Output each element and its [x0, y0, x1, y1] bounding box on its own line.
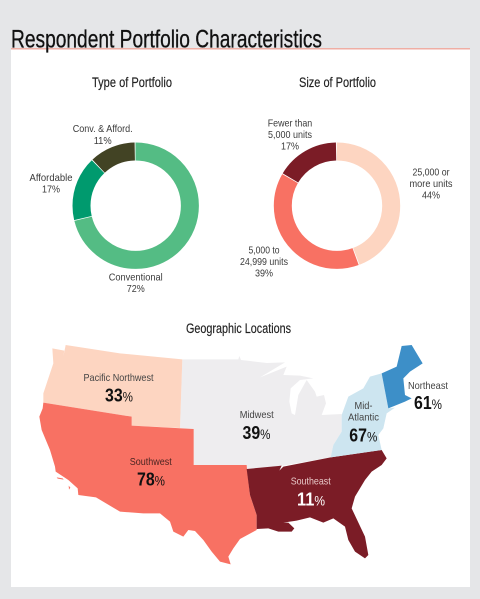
panel: type of portfolio — [30, 75, 190, 295]
label: 5,000 to 24,999 units: 24,999 units — [240, 256, 288, 268]
label: affordable: 17% — [42, 184, 60, 196]
label: fewer than 5,000 units: 17% — [281, 141, 299, 153]
donut chart: size of portfolio — [283, 152, 391, 260]
label: affordable: Affordable — [30, 172, 73, 184]
label: southeast 11%: Southeast — [291, 475, 331, 487]
title: Respondent Portfolio Characteristics — [11, 26, 322, 54]
region: northeast — [382, 345, 423, 408]
region: southeast — [247, 450, 387, 558]
label: mid-atlantic 67% — [348, 400, 379, 446]
label: midwest 39% — [240, 409, 274, 443]
label: 5,000 to 24,999 units: 5,000 to — [248, 244, 280, 256]
label: pacific northwest 33%: 33% — [105, 385, 133, 406]
panel: size of portfolio — [240, 75, 452, 280]
label: southwest 78% — [130, 456, 172, 490]
label: 25,000 or more units: more units — [410, 178, 452, 190]
label: mid-atlantic 67%: 67% — [349, 425, 377, 446]
heading: type of portfolio: Type of Portfolio — [92, 75, 172, 90]
label: fewer than 5,000 units: 5,000 units — [268, 129, 312, 141]
label: southeast 11%: 11% — [297, 489, 325, 510]
label: mid-atlantic 67%: Atlantic — [348, 412, 379, 424]
label: conventional: 72% — [127, 283, 145, 295]
label: fewer than 5,000 units: Fewer than — [268, 118, 312, 130]
label: 25,000 or more units: 44% — [422, 190, 440, 202]
label: conventional: Conventional — [109, 272, 163, 284]
label: midwest 39%: 39% — [242, 422, 270, 443]
label: pacific northwest 33%: Pacific Northwest — [84, 372, 154, 384]
label: southeast 11% — [291, 475, 331, 510]
label: pacific northwest 33% — [84, 372, 154, 406]
label: midwest 39%: Midwest — [240, 409, 274, 421]
label: 25,000 or more units: 25,000 or — [412, 167, 450, 179]
region: mid-atlantic — [331, 373, 395, 457]
label: conventional and affordable: 11% — [94, 135, 112, 147]
region: midwest — [180, 356, 342, 469]
label: northeast 61% — [408, 380, 448, 413]
title underline — [11, 48, 470, 50]
label: conventional and affordable: Conv. & Afford. — [73, 123, 133, 135]
heading: geographic locations: Geographic Locations — [186, 321, 291, 336]
heading: size of portfolio: Size of Portfolio — [299, 75, 376, 90]
label: northeast 61%: Northeast — [408, 380, 448, 392]
region: pacific northwest — [43, 345, 182, 428]
label: southwest 78%: Southwest — [130, 456, 172, 468]
region: southwest — [39, 403, 257, 564]
donut chart: type of portfolio — [82, 152, 190, 260]
label: mid-atlantic 67%: Mid- — [354, 400, 373, 412]
label: southwest 78%: 78% — [137, 469, 165, 490]
label: 5,000 to 24,999 units: 39% — [255, 268, 273, 280]
label: northeast 61%: 61% — [414, 392, 442, 413]
map: United States regions — [39, 345, 423, 564]
